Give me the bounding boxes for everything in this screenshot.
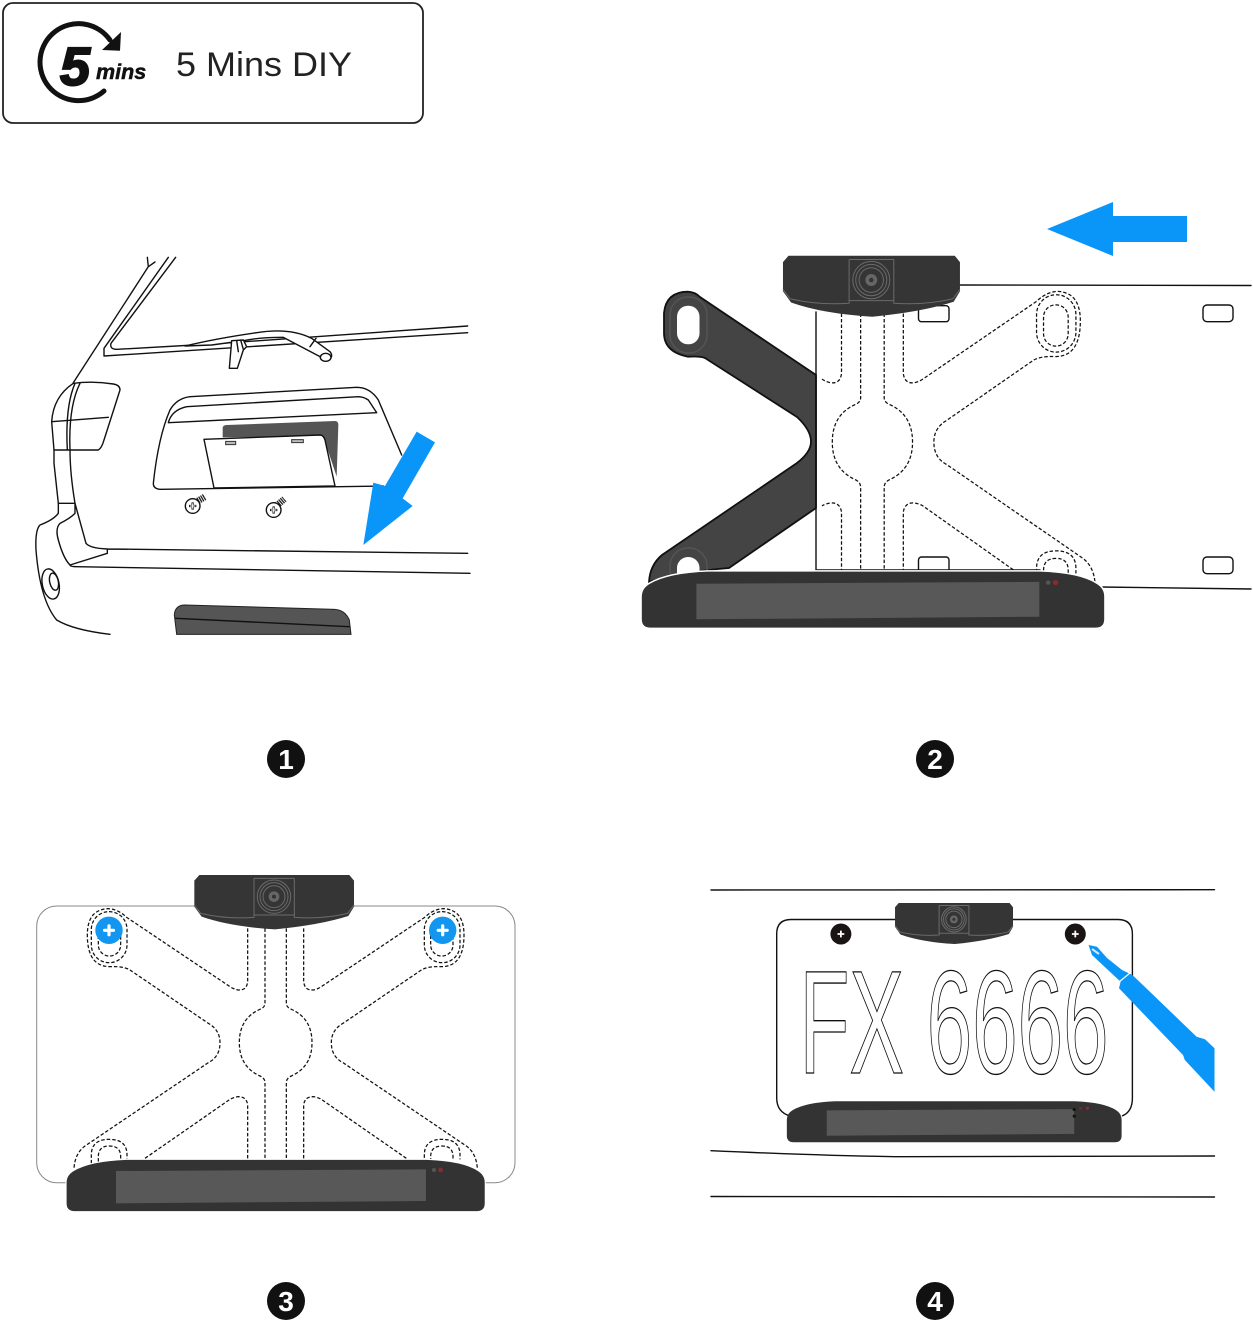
wiper [185, 331, 332, 368]
sensor bar [641, 571, 1105, 628]
plate outline [816, 285, 1251, 589]
icon: screwdriver [1088, 945, 1214, 1092]
screw right [266, 499, 284, 517]
badge label: 5 Mins DIY [176, 46, 352, 84]
badge: 5 mins DIY [3, 3, 423, 123]
car body lines [711, 890, 1214, 1197]
panel: step 3 fasten screws [37, 875, 515, 1212]
arrow: left [1047, 202, 1187, 256]
plate outline [37, 906, 515, 1183]
step number 3 [267, 1282, 305, 1320]
icon: 5 minutes circular arrow: 5 [60, 37, 91, 97]
bumper step [174, 605, 351, 634]
icon: 5 minutes circular arrow: mins [96, 60, 146, 84]
plate outline [777, 920, 1132, 1116]
licence plate [204, 435, 335, 488]
camera [895, 903, 1013, 944]
car rear line drawing [36, 257, 470, 634]
arrow: down left [363, 432, 435, 545]
reflector [39, 567, 62, 601]
step number 2: 2 [927, 744, 943, 775]
step number 1: 1 [278, 744, 294, 775]
plate recess [153, 387, 402, 489]
screw left [185, 497, 205, 513]
camera [783, 256, 960, 317]
panel: step 2 slide bracket behind plate [641, 202, 1251, 628]
dark plate backing [223, 421, 338, 477]
sensor bar [787, 1101, 1122, 1142]
sensor bar [66, 1159, 485, 1212]
screw: right black [1065, 924, 1086, 944]
dashed bracket outline [74, 909, 477, 1168]
step number 4 [916, 1282, 954, 1320]
step number 1 [267, 740, 305, 778]
step number 2 [916, 740, 954, 778]
panel: step 4 tighten plate on car [711, 890, 1214, 1197]
step number 4: 4 [927, 1286, 943, 1317]
dark bracket behind plate [649, 292, 816, 588]
icon: 5 minutes circular arrow [40, 24, 146, 101]
screw: right blue [429, 917, 456, 944]
step number 3: 3 [278, 1286, 294, 1317]
screw: left black [830, 924, 851, 944]
camera [194, 875, 354, 929]
screw: left blue [95, 917, 123, 944]
plate slots [918, 305, 1233, 574]
panel: step 1 remove plate from car [36, 257, 470, 634]
dashed bracket outline [822, 291, 1095, 583]
